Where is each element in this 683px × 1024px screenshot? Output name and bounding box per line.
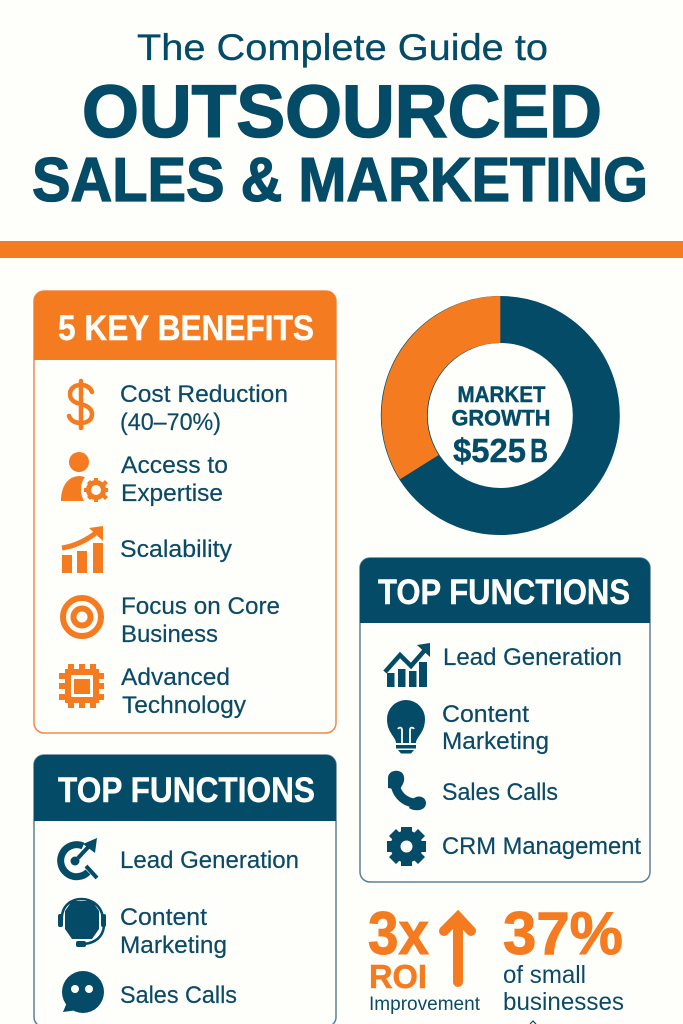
donut label: MARKET [458,382,546,407]
panel header: top functions left: TOP FUNCTIONS [58,771,315,810]
donut label: GROWTH [452,406,550,430]
stat: 3x ROI improvement: ROI [369,958,427,995]
orange divider bar [0,241,683,258]
benefit: focus on core business: Business [121,621,218,648]
panel header: top functions right: TOP FUNCTIONS [378,573,630,612]
benefit: advanced technology: Advanced [121,664,230,691]
title [32,27,648,215]
benefit: cost reduction: Cost Reduction [120,381,288,408]
stat: 37% of small businesses [503,900,624,1024]
stat: 3x ROI improvement: Improvement [369,994,481,1015]
function: lead generation: Lead Generation [443,644,622,671]
stat: 37% of small businesses: 37% [503,900,623,967]
title: SALES & MARKETING [32,146,648,215]
benefit: cost reduction: (40–70%) [120,409,221,436]
function: content marketing: Marketing [442,728,549,755]
benefit: access to expertise: Access to [121,452,228,479]
benefit: focus on core business: Focus on Core [121,593,280,620]
title: OUTSOURCED [82,70,602,153]
function: content marketing: Content [120,904,207,931]
donut label: $525 [453,432,526,469]
icon: chat bubble [62,971,104,1013]
donut label: B [530,432,548,469]
icon: target [63,598,101,636]
icon: phone [388,771,426,810]
function: lead generation: Lead Generation [120,847,299,874]
stat: 3x ROI improvement [368,900,481,1015]
chart: market growth donut [382,296,596,512]
icon: growth chart [62,526,103,573]
icon: rising chart [385,643,430,687]
icon: lead target with arrow [61,838,97,878]
icon: gear [387,827,426,866]
benefit: scalability: Scalability [120,536,232,563]
icon: headset [58,899,106,947]
function: content marketing: Content [442,701,529,728]
icon: dollar [69,381,92,428]
stat: 3x ROI improvement: 3x [368,900,429,967]
icon: light bulb [387,700,425,754]
stat: 37% of small businesses: businesses [503,988,624,1016]
function: crm management: CRM Management [442,833,641,860]
panel header: top functions right [360,558,650,623]
donut label [452,382,550,469]
panel header: 5 key benefits: 5 KEY BENEFITS [58,309,314,348]
panel header: top functions left [34,755,336,821]
function: sales calls: Sales Calls [120,982,237,1009]
title: The Complete Guide to [137,27,548,68]
function: sales calls: Sales Calls [442,779,558,806]
benefit: access to expertise: Expertise [121,480,223,507]
arrow: up [444,917,471,982]
icon: person with gear [61,452,108,502]
icon: chip [59,664,104,708]
panel: top functions left [34,755,336,1024]
benefit: advanced technology: Technology [122,692,246,719]
panel: 5 key benefits [34,291,336,733]
panel: top functions right [360,558,650,882]
stat: 37% of small businesses: of small [503,961,586,989]
panel header: 5 key benefits [34,291,336,360]
function: content marketing: Marketing [120,932,227,959]
